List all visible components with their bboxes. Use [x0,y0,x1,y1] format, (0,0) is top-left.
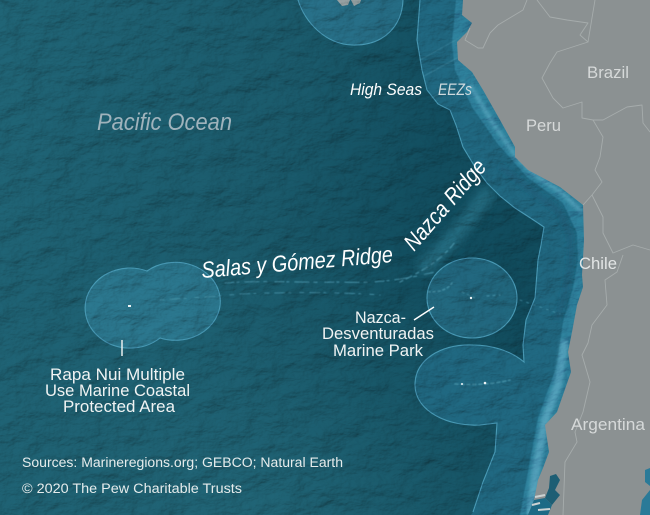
label: Rapa Nui Multiple Use Marine Coastal Protected Area [45,365,190,416]
sources: Sources: Marineregions.org; GEBCO; Natural Earth [22,455,343,470]
label: Salas y Gomez Ridge: Salas y Gómez Ridge [200,241,394,283]
label: Chile: Chile [579,255,617,273]
EEZ waters [415,0,650,515]
label: Brazil: Brazil [587,64,629,82]
label: Nazca-Desventuradas Marine Park: Marine Park [333,341,423,360]
leader line: Nazca-Desventuradas [414,307,434,320]
copyright: © 2020 The Pew Charitable Trusts [22,481,242,496]
label: Nazca-Desventuradas Marine Park: Nazca- [355,308,406,327]
label: Rapa Nui Multiple Use Marine Coastal Protected Area: Rapa Nui Multiple [50,365,185,384]
label: High Seas: High Seas [350,80,422,99]
Galapagos protected area [298,0,403,45]
label: Pacific Ocean: Pacific Ocean [97,109,232,136]
Nazca Ridge glow [420,190,490,270]
label: Rapa Nui Multiple Use Marine Coastal Protected Area: Use Marine Coastal [45,381,190,400]
label: Nazca-Desventuradas Marine Park [322,308,434,360]
leader line: Rapa Nui [121,340,123,356]
Patagonian channels [528,468,650,515]
Nazca-Desventuradas protected area [427,258,517,338]
label: Argentina: Argentina [571,416,646,434]
continental shelf [452,0,620,515]
Rapa Nui protected area [85,262,220,348]
EEZ boundary [415,0,544,512]
label: EEZs: EEZs [438,80,472,99]
country borders [465,0,650,515]
label: Nazca-Desventuradas Marine Park: Desventuradas [322,324,434,343]
label: Rapa Nui Multiple Use Marine Coastal Protected Area: Protected Area [63,397,176,416]
seamount chains [160,32,560,385]
islands [128,297,486,385]
label: Peru: Peru [526,117,561,135]
label: Nazca Ridge: Nazca Ridge [398,154,491,255]
South America land [457,0,650,515]
